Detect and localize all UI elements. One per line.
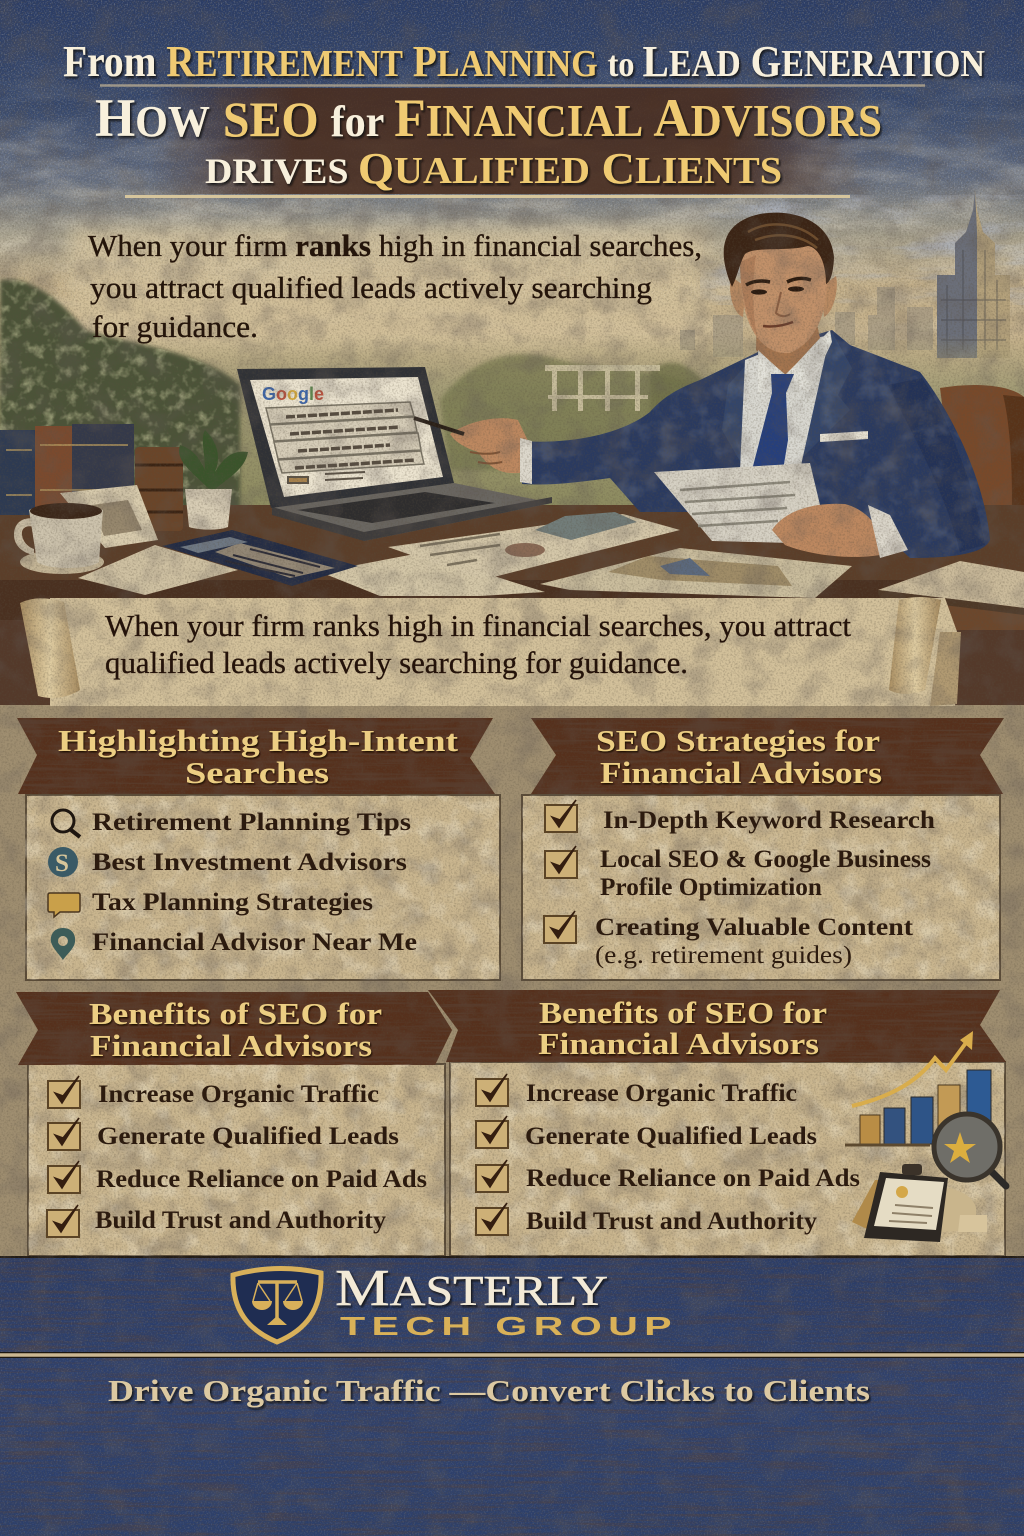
illustration: man in navy suit: [414, 213, 995, 565]
logo wordmark: Tech Group: TECH GROUP: [340, 1311, 678, 1341]
banner ribbon: benefits left: [16, 992, 452, 1065]
list: benefits right: Reduce Reliance on Paid Ads: [526, 1163, 860, 1192]
background: stone area behind panels: [0, 705, 1024, 1260]
icon: magnifier with star: [934, 1114, 1006, 1186]
icon: clipboard and scrolls: [852, 1164, 987, 1242]
heading: benefits left: Benefits of SEO for: [89, 996, 382, 1031]
heading: benefits left: Financial Advisors: [90, 1028, 372, 1063]
checkbox: [545, 846, 577, 878]
intro text: [88, 228, 702, 344]
brows, eyes and mouth: [746, 278, 811, 285]
heading: SEO strategies: SEO Strategies for: [596, 723, 880, 758]
icon: speech bubble: [48, 893, 80, 917]
list: SEO strategies: [544, 800, 935, 969]
list: benefits right: Increase Organic Traffic: [526, 1078, 797, 1107]
background: sky and parchment: [0, 0, 1024, 420]
list: benefits right: [476, 1074, 860, 1235]
title line 3: DRIVES QUALIFIED CLIENTS: [205, 144, 782, 193]
list: benefits left: [47, 1076, 427, 1237]
icon: bar chart with rising arrow: [845, 1031, 991, 1145]
neck: [756, 315, 820, 375]
title backing band: [100, 86, 925, 196]
icon: dollar coin: S: [55, 850, 69, 877]
list: high-intent searches: [48, 807, 417, 960]
checkbox: [544, 911, 576, 943]
checkbox: [48, 1161, 80, 1193]
scroll text: [105, 608, 851, 680]
list: benefits left: Build Trust and Authority: [95, 1205, 386, 1234]
banner ribbon: high-intent searches: [17, 718, 495, 794]
list: high-intent searches: Retirement Planning Tips: [92, 807, 411, 836]
heading: benefits right: Benefits of SEO for: [539, 995, 827, 1030]
footer divider: [0, 1352, 1024, 1358]
illustration: calculator: [162, 530, 358, 586]
illustration: landscape and trees: [0, 279, 1024, 520]
illustration: coffee cup: [14, 503, 104, 574]
shirt: [740, 335, 830, 470]
illustration: city skyline: [680, 190, 1010, 358]
panel: high-intent searches: [26, 795, 500, 980]
banner ribbon: benefits right: [428, 990, 1006, 1062]
checkbox: [48, 1076, 80, 1108]
heading: SEO strategies: Financial Advisors: [600, 755, 882, 790]
list: high-intent searches: Best Investment Advisors: [92, 847, 407, 876]
heading: highlighting high-intent searches: Highlighting High-Intent: [58, 723, 459, 758]
logo: shield with scales: [233, 1268, 321, 1342]
holding hand: [772, 504, 881, 557]
panel: benefits left: [28, 1064, 445, 1256]
heading: SEO strategies: [596, 723, 882, 790]
list: benefits left: Reduce Reliance on Paid Ads: [96, 1164, 427, 1193]
pointing hand: [450, 418, 530, 473]
suit body and sleeve: [520, 330, 990, 558]
illustration: papers on desk: [78, 512, 1024, 615]
list: SEO strategies: Profile Optimization: [600, 872, 822, 901]
illustration: laptop: [237, 367, 552, 541]
list: SEO strategies: Local SEO & Google Business: [600, 844, 931, 873]
logo wordmark: Masterly: MASTERLY: [335, 1260, 608, 1317]
list: SEO strategies: (e.g. retirement guides): [595, 942, 852, 969]
intro text: When your firm ranks high in financial searches,: [88, 228, 702, 263]
shirt cuff right: [868, 505, 908, 558]
suit fabric marbling: [532, 333, 989, 558]
collar: [758, 330, 832, 392]
list: high-intent searches: Tax Planning Strategies: [92, 887, 373, 916]
ears: [730, 276, 837, 317]
scroll text: When your firm ranks high in financial searches, you attract: [105, 608, 851, 643]
checkbox: [476, 1160, 508, 1192]
scroll banner: [20, 597, 961, 706]
face: [740, 240, 827, 353]
icon: location pin: [51, 928, 75, 960]
heading: highlighting high-intent searches: [58, 723, 459, 790]
checkbox: [47, 1205, 79, 1237]
bottom navy band: [0, 1256, 1024, 1536]
heading: highlighting high-intent searches: Searches: [185, 755, 329, 790]
panel: benefits right: [450, 1062, 1005, 1256]
checkbox: [476, 1203, 508, 1235]
banner ribbon: SEO strategies: [531, 718, 1004, 794]
illustration: calendar card: [60, 485, 158, 548]
necktie: [752, 374, 794, 470]
checkbox: [476, 1116, 508, 1148]
pen: [414, 418, 464, 434]
heading: benefits left: [89, 996, 382, 1063]
checkbox: [545, 800, 577, 832]
illustration: desk: [0, 505, 1024, 710]
title: [63, 37, 985, 193]
checkbox: [48, 1118, 80, 1150]
panel: SEO strategies: [522, 795, 1000, 980]
list: SEO strategies: Creating Valuable Content: [595, 912, 914, 941]
icon: dollar coin: [48, 847, 78, 877]
checkbox: [476, 1074, 508, 1106]
intro text: for guidance.: [92, 309, 258, 344]
list: benefits left: Increase Organic Traffic: [98, 1079, 379, 1108]
list: benefits right: Generate Qualified Leads: [525, 1121, 817, 1150]
scroll text: qualified leads actively searching for guidance.: [105, 645, 688, 680]
tagline: Drive Organic Traffic —Convert Clicks to Clients: [108, 1373, 870, 1408]
list: high-intent searches: Financial Advisor Near Me: [92, 927, 417, 956]
illustration: chair: [940, 385, 1024, 545]
title line 2: HOW SEO for FINANCIAL ADVISORS: [95, 88, 882, 148]
intro text: you attract qualified leads actively searching: [90, 270, 652, 305]
hair: [724, 213, 834, 287]
icon: magnifier: [52, 810, 80, 837]
title line 1: From RETIREMENT PLANNING to LEAD GENERATION: [63, 37, 985, 86]
heading: benefits right: Financial Advisors: [538, 1026, 819, 1061]
illustration: books and barrel: [0, 424, 183, 531]
illustration: potted plant: [179, 430, 248, 530]
list: SEO strategies: In-Depth Keyword Research: [603, 805, 935, 834]
list: benefits left: Generate Qualified Leads: [97, 1121, 399, 1150]
shirt cuff: [520, 438, 532, 484]
google wordmark: Google: [262, 384, 324, 404]
heading: benefits right: [538, 995, 827, 1061]
paper held: [654, 463, 820, 543]
pocket square: [820, 431, 868, 442]
list: benefits right: Build Trust and Authority: [526, 1206, 817, 1235]
